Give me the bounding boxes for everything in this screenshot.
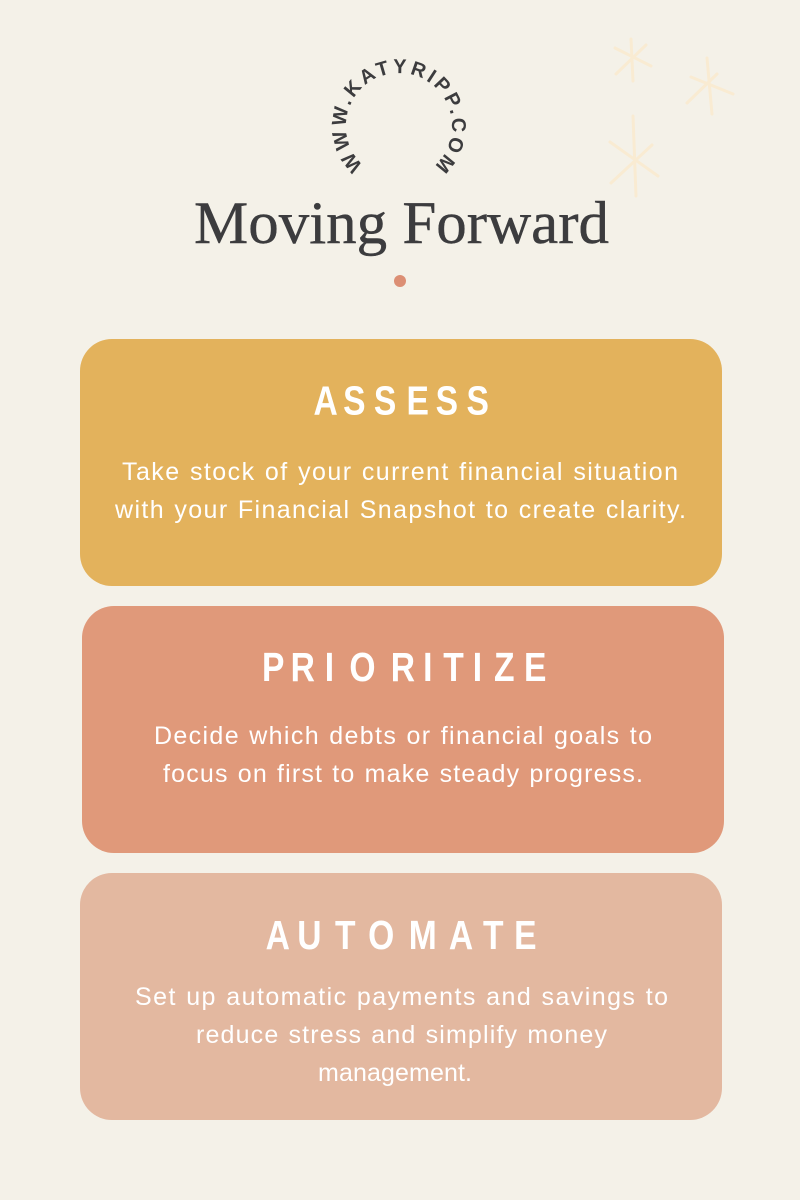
panel: prioritize <box>82 606 724 853</box>
circular website text: WWW.KATYRIPP.COM <box>332 59 466 174</box>
text: automate description: Set up automatic payments and savings to <box>135 983 668 1011</box>
text: assess description <box>114 458 686 524</box>
text: assess description: Take stock of your current financial situation <box>122 458 678 486</box>
title: Moving Forward <box>194 190 609 256</box>
text: automate description <box>135 983 668 1087</box>
text: automate description: management. <box>318 1059 472 1087</box>
text: prioritize description <box>154 722 652 788</box>
heading: prioritize: PRIORITIZE <box>262 644 546 690</box>
text: prioritize description: Decide which debts or financial goals to <box>154 722 652 750</box>
accent dot <box>394 275 406 287</box>
text: assess description: with your Financial Snapshot to create clarity. <box>114 496 686 524</box>
decorative stars <box>610 39 733 196</box>
text: prioritize description: focus on first to make steady progress. <box>163 760 643 788</box>
heading: assess: ASSESS <box>314 377 489 423</box>
panel: automate <box>80 873 722 1120</box>
heading: automate: AUTOMATE <box>266 912 537 958</box>
text: automate description: reduce stress and simplify money <box>196 1021 608 1049</box>
panel: assess <box>80 339 722 586</box>
